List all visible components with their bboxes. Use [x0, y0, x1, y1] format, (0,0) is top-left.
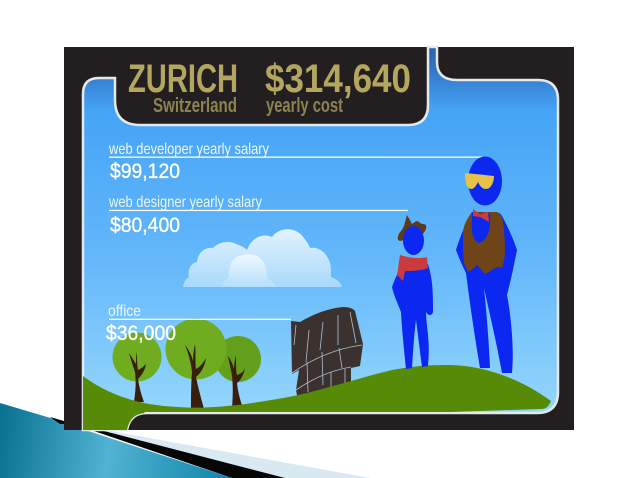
- slide corner decoration: [0, 403, 370, 478]
- dark panel background: [64, 47, 574, 430]
- title: city: ZURICH: [128, 57, 238, 101]
- hills: [83, 365, 551, 432]
- office salary: office: [108, 303, 141, 320]
- subtitle: country: Switzerland: [153, 95, 237, 117]
- office salary: [106, 303, 291, 345]
- web designer salary: $80,400: [110, 214, 180, 237]
- web developer salary: web developer yearly salary: [108, 141, 269, 158]
- tall man: web developer: [456, 156, 517, 373]
- sky panel: [83, 47, 558, 430]
- small man: web designer: [392, 215, 433, 369]
- tree middle: [166, 318, 226, 409]
- web designer salary: [108, 194, 408, 237]
- web designer salary: web designer yearly salary: [108, 194, 262, 211]
- title: yearly cost amount: $314,640: [265, 57, 411, 101]
- clouds: [183, 229, 342, 287]
- web developer salary: [108, 141, 483, 183]
- office salary: $36,000: [106, 322, 176, 345]
- office building: [291, 307, 363, 400]
- subtitle: yearly cost: yearly cost: [266, 95, 343, 117]
- tree left: [112, 332, 162, 402]
- tree right: [215, 336, 261, 408]
- web developer salary: $99,120: [110, 160, 180, 183]
